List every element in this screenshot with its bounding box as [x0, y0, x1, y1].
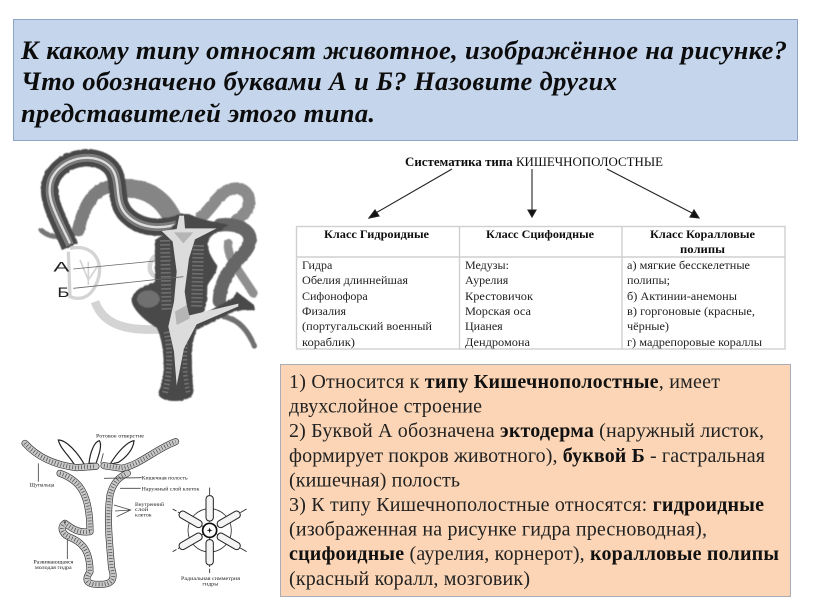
- hydra part labels: молодая гидра: [35, 565, 72, 571]
- question text: [20, 35, 787, 128]
- table header: Класс Гидроидные: [324, 229, 429, 241]
- column: Anthozoa: чёрные): [627, 319, 669, 333]
- column: Hydrozoa: (португальский военный: [302, 319, 433, 333]
- hydra part labels: Кишечная полость: [142, 475, 188, 481]
- illustration: labelled hydra and radial symmetry: [25, 434, 247, 588]
- arrows to classes: [369, 169, 699, 218]
- column: Anthozoa: г) мадрепоровые кораллы: [627, 335, 762, 349]
- column: Hydrozoa: Сифонофора: [302, 289, 368, 303]
- answer text: (красный коралл, мозговик): [289, 568, 530, 590]
- answer text: сцифоидные (аурелия, корнерот), коралловые полипы: [289, 543, 779, 565]
- answer text: двухслойное строение: [289, 396, 482, 418]
- label B: Б: [57, 284, 69, 300]
- oral tentacles: [58, 440, 134, 466]
- table header: полипы: [680, 244, 725, 256]
- column: Anthozoa: [627, 258, 762, 349]
- hydra body wall: [25, 442, 176, 584]
- hydra part labels: Развивающаяся: [33, 559, 74, 565]
- answer text: [289, 371, 779, 590]
- question text: представителей этого типа.: [21, 98, 375, 128]
- arrow: to Anthozoa: [607, 169, 699, 218]
- arrow: to Hydrozoa: [369, 169, 452, 218]
- answer text: формирует покров животного), буквой Б - гастральная: [289, 445, 765, 467]
- wall cell stripes: [165, 240, 198, 393]
- column: Hydrozoa: Обелия длиннейшая: [302, 273, 408, 287]
- column: Scyphozoa: Морская оса: [465, 304, 532, 318]
- question text: Что обозначено буквами А и Б? Назовите других: [21, 66, 617, 96]
- column: Scyphozoa: [465, 258, 533, 349]
- gastric cavity: [162, 216, 238, 386]
- column: Hydrozoa: Гидра: [302, 258, 333, 272]
- radial symmetry diagram: [173, 488, 247, 573]
- hydra part labels: слой: [135, 506, 149, 513]
- hydra part labels: Ротовое отверстие: [96, 434, 145, 440]
- illustration: hydra cross-section with labels A and B: [41, 158, 255, 401]
- column: Anthozoa: в) горгоновые (красные,: [627, 304, 755, 318]
- answer text: (изображенная на рисунке гидра пресноводная),: [289, 519, 707, 541]
- answer text: (кишечная) полость: [289, 469, 460, 491]
- column: Hydrozoa: [302, 258, 433, 349]
- panel: answer: [280, 364, 790, 596]
- panel: question: [14, 20, 798, 140]
- column: Scyphozoa: Крестовичок: [465, 289, 533, 303]
- answer text: 3) К типу Кишечнополостные относятся: гидроидные: [289, 494, 764, 516]
- table header: [324, 229, 755, 256]
- hydra part labels: Щупальца: [29, 483, 55, 489]
- table: classes of Coelenterata: [296, 226, 785, 349]
- column: Scyphozoa: Дендромона: [465, 335, 531, 349]
- column: Hydrozoa: Физалия: [302, 304, 346, 318]
- hydra part labels: гидры: [202, 582, 219, 588]
- leader lines: [38, 453, 142, 559]
- tentacles behind the body: [41, 187, 254, 346]
- column: Hydrozoa: кораблик): [302, 335, 355, 349]
- label lines: [73, 261, 183, 288]
- body wall: [132, 213, 255, 401]
- diagram title: Систематика типа КИШЕЧНОПОЛОСТНЫЕ: [405, 155, 663, 169]
- hydra part labels: Радиальная симметрия: [181, 576, 241, 582]
- column: Scyphozoa: Цианея: [465, 319, 503, 333]
- column: Anthozoa: а) мягкие бесскелетные: [627, 258, 750, 272]
- table header: Класс Коралловые: [650, 229, 755, 241]
- hydra part labels: Внутренний: [135, 501, 164, 508]
- ghost background shapes: [68, 247, 163, 330]
- hydra part labels: [29, 434, 241, 588]
- table header: Класс Сцифоидные: [486, 229, 594, 241]
- label A: А: [53, 259, 70, 275]
- column: Scyphozoa: Медузы:: [465, 258, 509, 272]
- column: Anthozoa: б) Актинии-анемоны: [627, 289, 737, 303]
- bud: [137, 290, 160, 308]
- answer text: 2) Буквой А обозначена эктодерма (наружный листок,: [289, 420, 764, 442]
- question text: К какому типу относят животное, изображённое на рисунке?: [20, 35, 787, 65]
- long dark tentacle: [50, 158, 180, 247]
- hydra part labels: клеток: [135, 512, 152, 518]
- column: Anthozoa: полипы;: [627, 273, 670, 287]
- hydra part labels: Наружный слой клеток: [142, 485, 200, 492]
- arrow: to Scyphozoa: [528, 169, 536, 217]
- answer text: 1) Относится к типу Кишечнополостные, имеет: [289, 371, 720, 393]
- column: Scyphozoa: Аурелия: [465, 273, 509, 287]
